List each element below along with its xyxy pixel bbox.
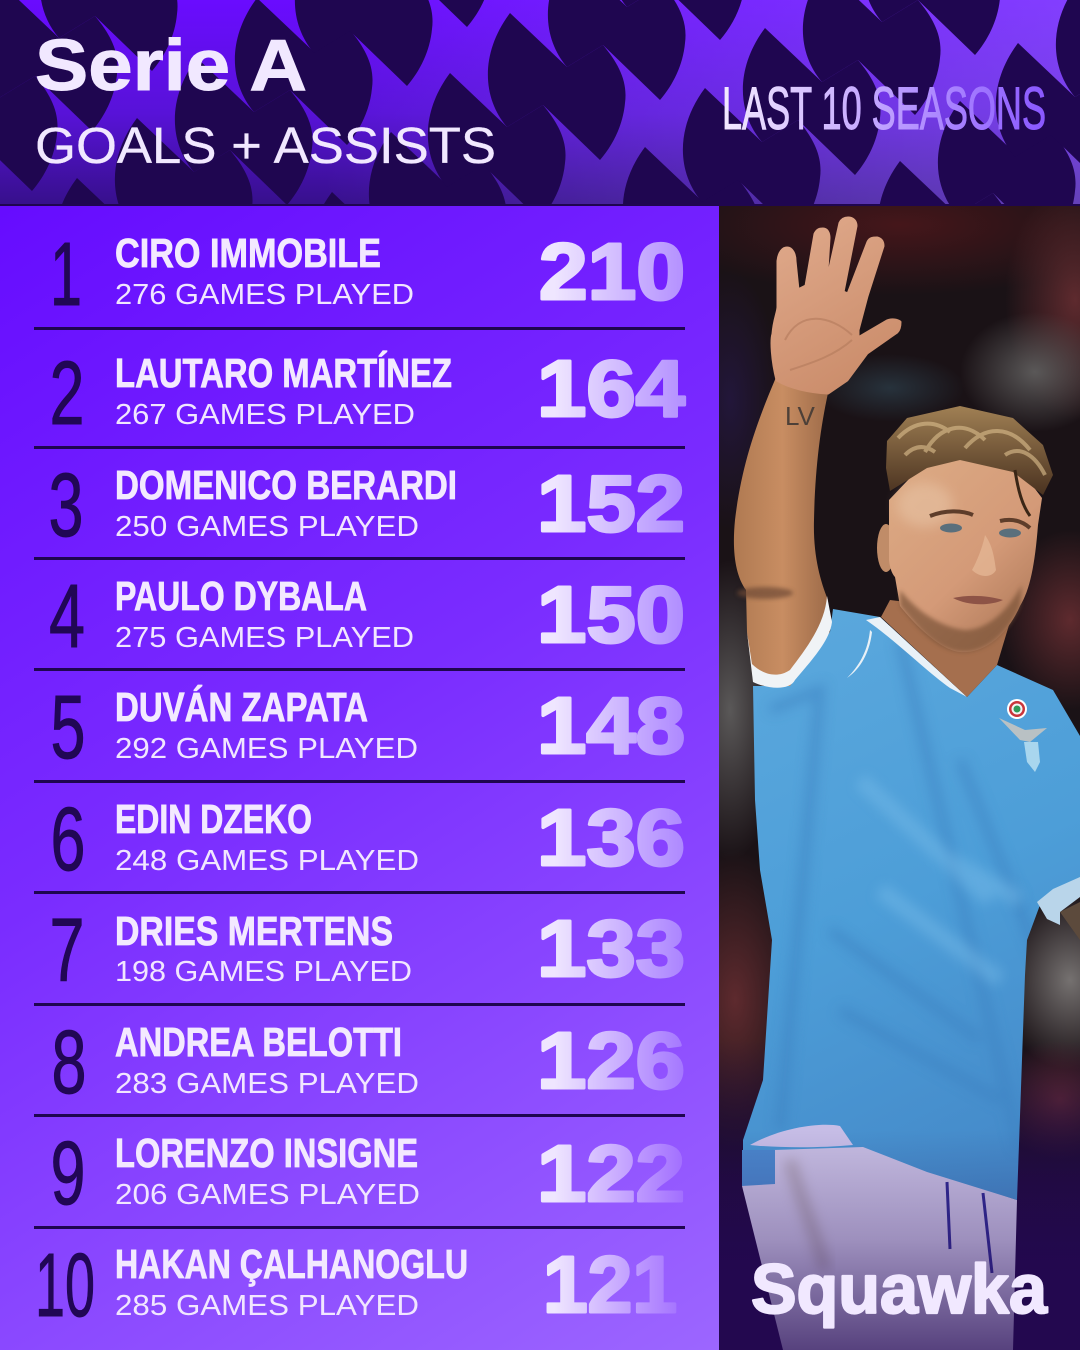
row 4: Paulo Dybala: PAULO DYBALA: [115, 573, 367, 619]
row 8: Andrea Belotti: [52, 1013, 685, 1113]
row 10: Hakan Çalhanoglu: HAKAN ÇALHANOGLU: [115, 1241, 468, 1287]
row 5: Duván Zapata: 292 GAMES PLAYED: [115, 733, 418, 765]
row 3: Domenico Berardi: [48, 456, 685, 556]
header panel: [0, 0, 1080, 204]
row 8: Andrea Belotti: ANDREA BELOTTI: [115, 1019, 402, 1065]
subtitle: goals + assists: GOALS + ASSISTS: [35, 117, 496, 174]
row 5: Duván Zapata: 148: [537, 681, 685, 770]
row 6: Edin Dzeko: 6: [50, 790, 86, 890]
right forearm and cuff: [1060, 902, 1080, 940]
row 3: Domenico Berardi: 152: [537, 459, 685, 548]
row 1: Ciro Immobile: 276 GAMES PLAYED: [115, 279, 414, 311]
row 2: Lautaro Martínez: 164: [537, 344, 686, 433]
row 1: Ciro Immobile: 210: [539, 227, 685, 316]
neck: [881, 600, 1012, 697]
row 9: Lorenzo Insigne: LORENZO INSIGNE: [115, 1130, 418, 1176]
row 9: Lorenzo Insigne: 122: [537, 1129, 685, 1218]
title: Serie A: Serie A: [35, 26, 307, 106]
row 7: Dries Mertens: DRIES MERTENS: [115, 908, 393, 954]
row 6: Edin Dzeko: 136: [537, 793, 685, 882]
row 2: Lautaro Martínez: [50, 344, 686, 444]
row 2: Lautaro Martínez: 2: [50, 344, 84, 444]
row 10: Hakan Çalhanoglu: 121: [543, 1240, 677, 1329]
row 4: Paulo Dybala: 4: [49, 567, 85, 667]
logo: Squawka: Squawka: [751, 1250, 1048, 1328]
photo: player waving: [719, 206, 1080, 1350]
row 10: Hakan Çalhanoglu: 10: [35, 1236, 95, 1336]
row 8: Andrea Belotti: 8: [52, 1013, 86, 1113]
club crest: [999, 699, 1047, 772]
row 9: Lorenzo Insigne: 206 GAMES PLAYED: [115, 1179, 420, 1211]
hair: [886, 406, 1053, 495]
shorts: [742, 1145, 1017, 1350]
row 1: Ciro Immobile: CIRO IMMOBILE: [115, 230, 381, 276]
row 6: Edin Dzeko: 248 GAMES PLAYED: [115, 845, 419, 877]
row 10: Hakan Çalhanoglu: [35, 1236, 677, 1336]
row 7: Dries Mertens: [50, 901, 685, 1001]
head: [889, 460, 1042, 652]
tattoo: LV: [785, 401, 816, 431]
row 4: Paulo Dybala: 275 GAMES PLAYED: [115, 622, 414, 654]
row 7: Dries Mertens: 198 GAMES PLAYED: [115, 956, 412, 988]
row 7: Dries Mertens: 133: [537, 904, 685, 993]
row 3: Domenico Berardi: DOMENICO BERARDI: [115, 462, 457, 508]
row 9: Lorenzo Insigne: 9: [50, 1124, 86, 1224]
row 2: Lautaro Martínez: 267 GAMES PLAYED: [115, 399, 415, 431]
ear: [877, 524, 890, 572]
row 5: Duván Zapata: [50, 678, 685, 778]
row 6: Edin Dzeko: [50, 790, 685, 890]
row 10: Hakan Çalhanoglu: 285 GAMES PLAYED: [115, 1290, 419, 1322]
row 4: Paulo Dybala: 150: [537, 570, 685, 659]
hand: [772, 218, 900, 393]
row 1: Ciro Immobile: [50, 225, 685, 325]
arm: [734, 375, 830, 690]
row 2: Lautaro Martínez: LAUTARO MARTÍNEZ: [115, 350, 452, 396]
row 7: Dries Mertens: 7: [50, 901, 84, 1001]
row 4: Paulo Dybala: [49, 567, 685, 667]
row 9: Lorenzo Insigne: [50, 1124, 685, 1224]
row 8: Andrea Belotti: 283 GAMES PLAYED: [115, 1068, 419, 1100]
row 6: Edin Dzeko: EDIN DZEKO: [115, 796, 312, 842]
panel: ranking list background: [0, 206, 719, 1350]
row 1: Ciro Immobile: 1: [50, 225, 82, 325]
row 8: Andrea Belotti: 126: [537, 1016, 685, 1105]
row 3: Domenico Berardi: 250 GAMES PLAYED: [115, 511, 419, 543]
row 5: Duván Zapata: 5: [50, 678, 86, 778]
shirt: [743, 609, 1080, 1200]
row 3: Domenico Berardi: 3: [48, 456, 84, 556]
row 5: Duván Zapata: DUVÁN ZAPATA: [115, 684, 368, 730]
header leaf pattern: [0, 0, 1080, 204]
brows, eyes, nose and mouth: [930, 511, 1030, 604]
sleeve and collar trim: [747, 596, 832, 688]
